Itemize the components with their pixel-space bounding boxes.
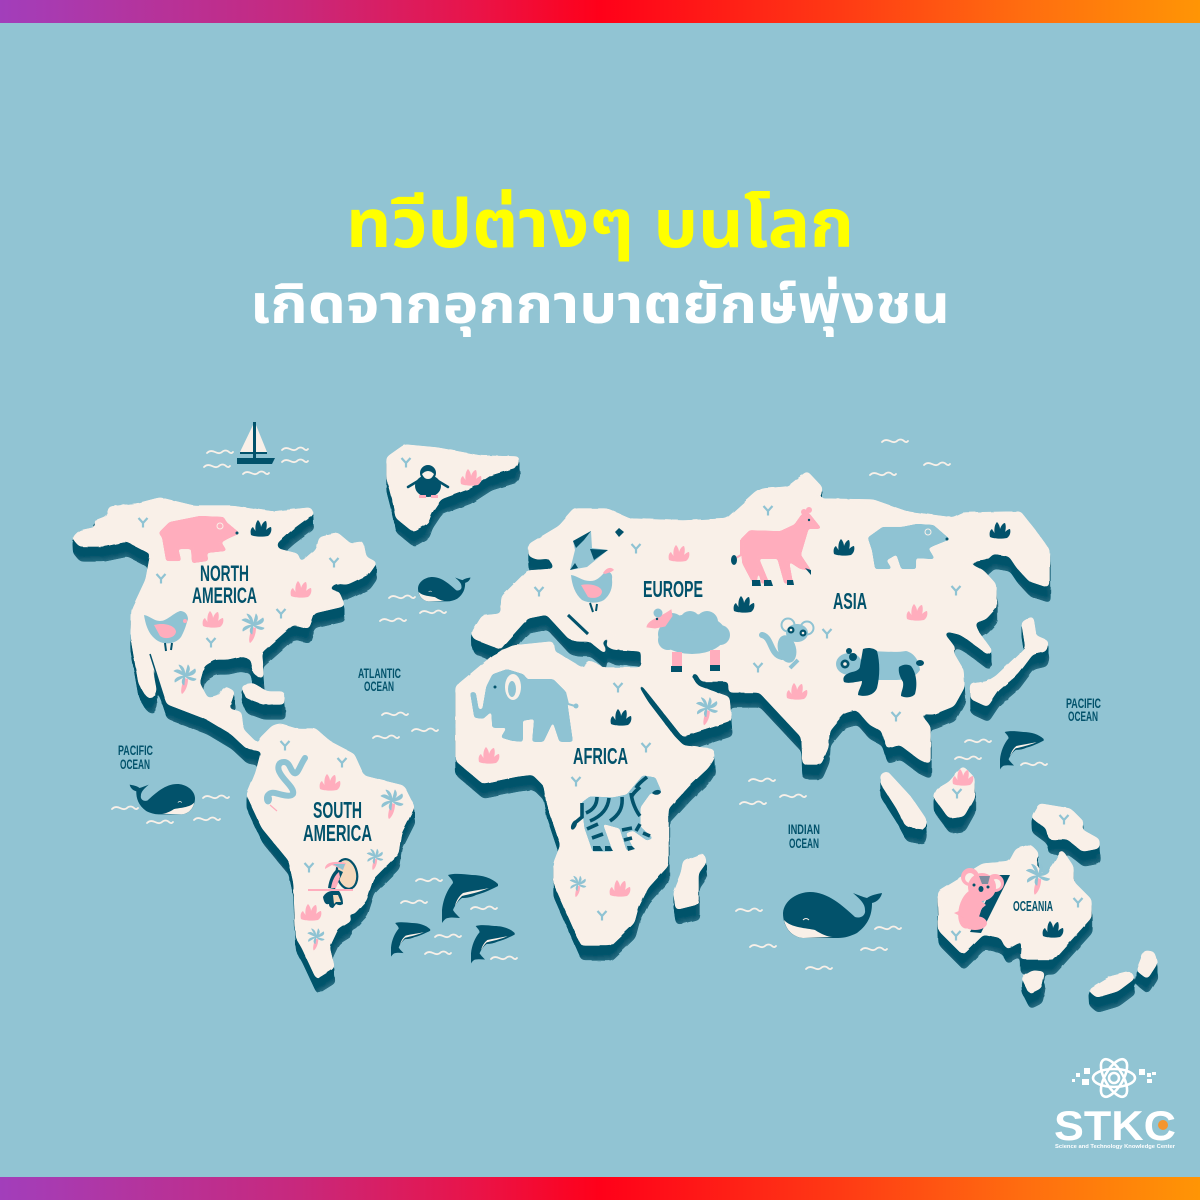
land: Caribbean island xyxy=(243,685,283,703)
land: New Zealand north xyxy=(1090,973,1133,996)
icon: dolphin large xyxy=(442,874,498,923)
icon: small whale north atlantic xyxy=(418,577,470,601)
logo atom mark xyxy=(1093,1055,1135,1101)
title: white line: เกิดจากอุกกาบาตยักษ์พุ่งชน xyxy=(250,275,950,337)
Baltic sea xyxy=(150,528,624,698)
bottom gradient bar xyxy=(0,1177,1200,1200)
land: New Zealand south xyxy=(1138,952,1156,977)
label: Pacific Ocean right: OCEAN xyxy=(1068,709,1098,724)
land: Madagascar xyxy=(675,855,705,908)
sprout marks xyxy=(138,458,1082,940)
label: Indian Ocean xyxy=(788,822,820,851)
label: North America: NORTH xyxy=(200,561,249,586)
icon: blue bird xyxy=(144,611,188,651)
label: Africa: AFRICA xyxy=(573,743,628,769)
dark plants xyxy=(251,520,1063,938)
land: Tasmania xyxy=(1023,972,1043,992)
land: Sumatra xyxy=(882,773,925,828)
land: Japan xyxy=(972,618,1047,705)
land: South America xyxy=(248,725,413,977)
icon: sailboat xyxy=(237,422,275,464)
icon: snake xyxy=(264,758,305,811)
label: Atlantic Ocean: ATLANTIC xyxy=(358,666,401,681)
icon: okapi xyxy=(731,507,820,586)
sea waves xyxy=(112,440,1047,969)
title: yellow line: ทวีปต่างๆ บนโลก xyxy=(346,186,854,262)
icon: monkey xyxy=(762,618,814,668)
label: Atlantic Ocean xyxy=(358,666,401,694)
logo orange dot xyxy=(1158,1120,1168,1130)
icon: dolphin small right xyxy=(471,925,515,963)
label: Pacific Ocean left: OCEAN xyxy=(120,757,150,772)
label: Europe: EUROPE xyxy=(643,576,703,602)
label: Indian Ocean: OCEAN xyxy=(789,836,819,851)
pink plants xyxy=(203,469,973,921)
label: Indian Ocean: INDIAN xyxy=(788,822,820,837)
label: Asia: ASIA xyxy=(833,588,867,614)
icon: elephant xyxy=(471,670,578,741)
label: North America xyxy=(192,561,257,608)
icon: pink polar bear xyxy=(160,517,238,562)
icon: panda xyxy=(836,648,924,697)
icon: koala with dark triangle xyxy=(954,868,1010,933)
label: Pacific Ocean right xyxy=(1066,696,1101,724)
icon: hen xyxy=(571,568,614,612)
logo: STKC xyxy=(1054,1055,1176,1150)
label: South America: SOUTH xyxy=(313,797,362,823)
land: Borneo xyxy=(935,768,973,817)
label: Atlantic Ocean: OCEAN xyxy=(364,679,394,694)
icon: whale pacific xyxy=(130,784,195,814)
label: Pacific Ocean left: PACIFIC xyxy=(118,743,153,758)
palm trees xyxy=(174,614,1050,950)
top gradient bar xyxy=(0,0,1200,23)
land: North America xyxy=(74,499,375,750)
land: Eurasia xyxy=(473,473,1048,763)
icon: dolphin small left xyxy=(391,922,430,957)
icon: dolphin pacific xyxy=(1000,731,1044,769)
label: North America: AMERICA xyxy=(192,583,257,608)
logo tagline: Science and Technology Knowledge Center xyxy=(1055,1144,1176,1150)
logo wordmark: STKC xyxy=(1054,1102,1176,1149)
label: Oceania: OCEANIA xyxy=(1013,899,1053,915)
land masses xyxy=(74,446,1156,996)
land: Greenland xyxy=(388,446,518,530)
icon: toucan xyxy=(308,857,360,908)
land: Africa xyxy=(457,643,713,944)
land: Australia xyxy=(939,846,1090,958)
icon: penguin xyxy=(408,465,448,498)
label: South America: AMERICA xyxy=(303,820,372,846)
label: Pacific Ocean right: PACIFIC xyxy=(1066,696,1101,711)
icon: zebra xyxy=(570,776,661,851)
icon: big whale indian ocean xyxy=(783,892,882,938)
land: New Guinea xyxy=(1033,805,1098,850)
icon: sheep xyxy=(647,608,730,672)
continent extruded shadows xyxy=(74,449,1157,1011)
label: South America xyxy=(303,797,372,846)
logo side squares xyxy=(1072,1068,1156,1085)
icon: pale blue bear xyxy=(869,525,948,568)
label: Pacific Ocean left xyxy=(118,743,153,772)
